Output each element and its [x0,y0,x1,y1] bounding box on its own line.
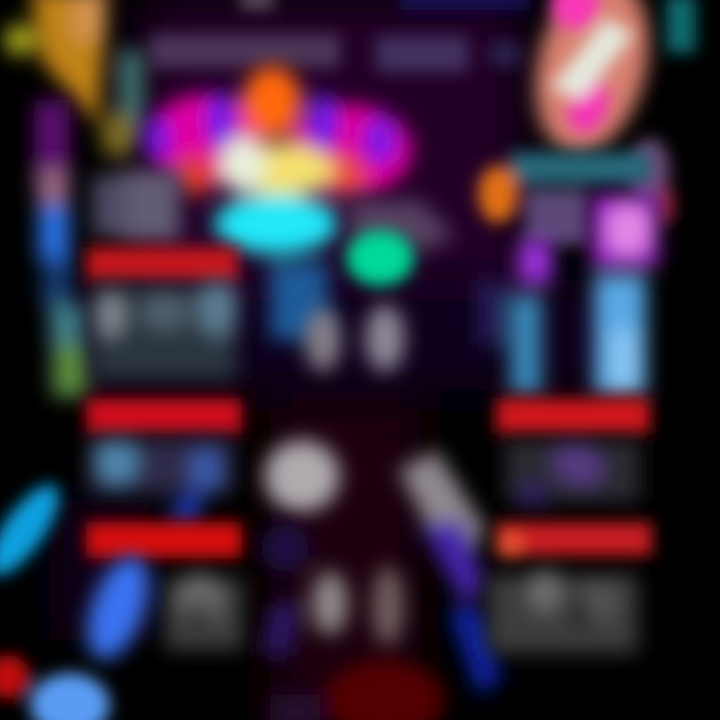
bottom-left cyan and blue accents [0,474,110,720]
surfboard stripes [543,0,634,138]
title band [150,0,530,72]
left panel 2: content [88,438,234,525]
right panel 2: header [496,398,650,434]
central fan icon [144,66,412,340]
centre diagonal stripe [398,450,502,695]
top-right accents [630,0,696,225]
left panel 1: content [92,280,238,380]
top-left orange pennant [4,0,144,159]
left panel 3: blue pill and gray icons [75,548,243,668]
centre icon pair, lower [260,524,404,655]
left decorative vertical strip [34,100,88,397]
right panel 3: gray icons [488,568,638,653]
centre dome icon [264,440,340,512]
right panel: glowing columns [478,195,658,395]
bottom dark-red shape [270,660,445,720]
left panel 1: header [86,247,238,281]
green badge [346,230,414,286]
right panel 3: header [496,522,652,559]
left panel 3: header [86,522,242,558]
centre icon pair, upper [305,304,405,372]
right panel: teal lintel and orange marker [478,152,650,245]
surfboard, top right [518,0,666,165]
right panel 2: content [505,436,640,509]
left panel 2: header [86,398,242,434]
central gray connector [92,170,455,250]
